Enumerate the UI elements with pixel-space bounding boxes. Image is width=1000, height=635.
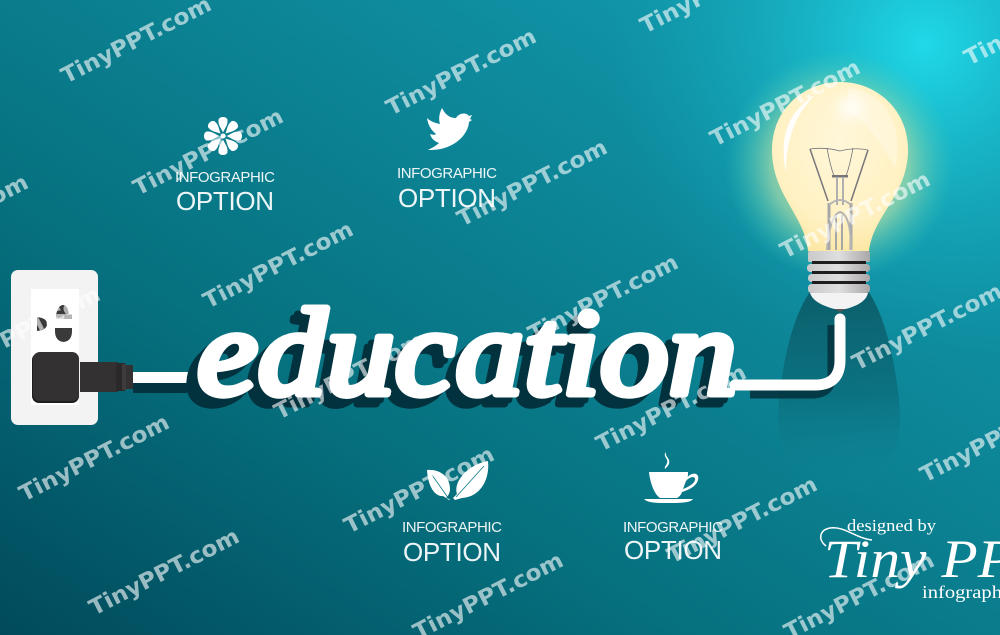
watermarks: TinyPPT.com [592,360,751,457]
icon: leaves [427,461,488,500]
option 4 [623,452,723,565]
watermarks: TinyPPT.com [15,410,174,507]
education title: education [197,284,737,421]
swash [821,528,872,546]
screw base [807,251,870,312]
option 4 heading: OPTION [624,535,722,565]
icon: coffee cup [644,452,698,503]
option 2 [397,108,497,213]
option 1 heading: OPTION [176,186,274,216]
watermarks: TinyPPT.com [270,328,429,425]
watermarks: TinyPPT.com [776,167,935,264]
option 3 heading: OPTION [403,537,501,567]
light bulb [772,82,908,312]
bulb glass [772,82,908,251]
watermarks: TinyPPT.com [524,250,683,347]
option 1 [175,117,275,216]
watermarks: TinyPPT.com [382,24,541,121]
watermarks: TinyPPT.com [848,279,1000,376]
option 2 heading: OPTION [398,183,496,213]
white power cord, left [133,372,190,393]
education title shadow: education [190,290,730,427]
option 3 [402,461,502,567]
watermarks: TinyPPT.com [85,524,244,621]
option 4 label: INFOGRAPHIC [623,519,723,536]
infographic word: infograph [922,582,1000,602]
watermarks: TinyPPT.com [129,104,288,201]
icon: flower [204,117,242,155]
option 3 label: INFOGRAPHIC [402,519,502,536]
Tiny PP script: Tiny PP [824,529,1000,589]
icon: bird [427,108,472,150]
white power cord, right [735,319,840,394]
watermarks: TinyPPT.com [453,135,612,232]
option 2 label: INFOGRAPHIC [397,165,497,182]
designed by: designed by [847,516,937,535]
bulb cast shadow [778,268,900,500]
watermarks: TinyPPT.com [340,442,499,539]
watermarks: TinyPPT.com [663,472,822,569]
watermarks: TinyPPT.com [199,217,358,314]
option 1 label: INFOGRAPHIC [175,169,275,186]
designer signature [821,516,1000,602]
wall socket [11,270,98,425]
education title shadow: education [186,294,726,431]
watermarks: TinyPPT.com [706,55,865,152]
filament [810,148,868,250]
power plug [32,352,133,403]
bulb highlights [784,88,898,172]
